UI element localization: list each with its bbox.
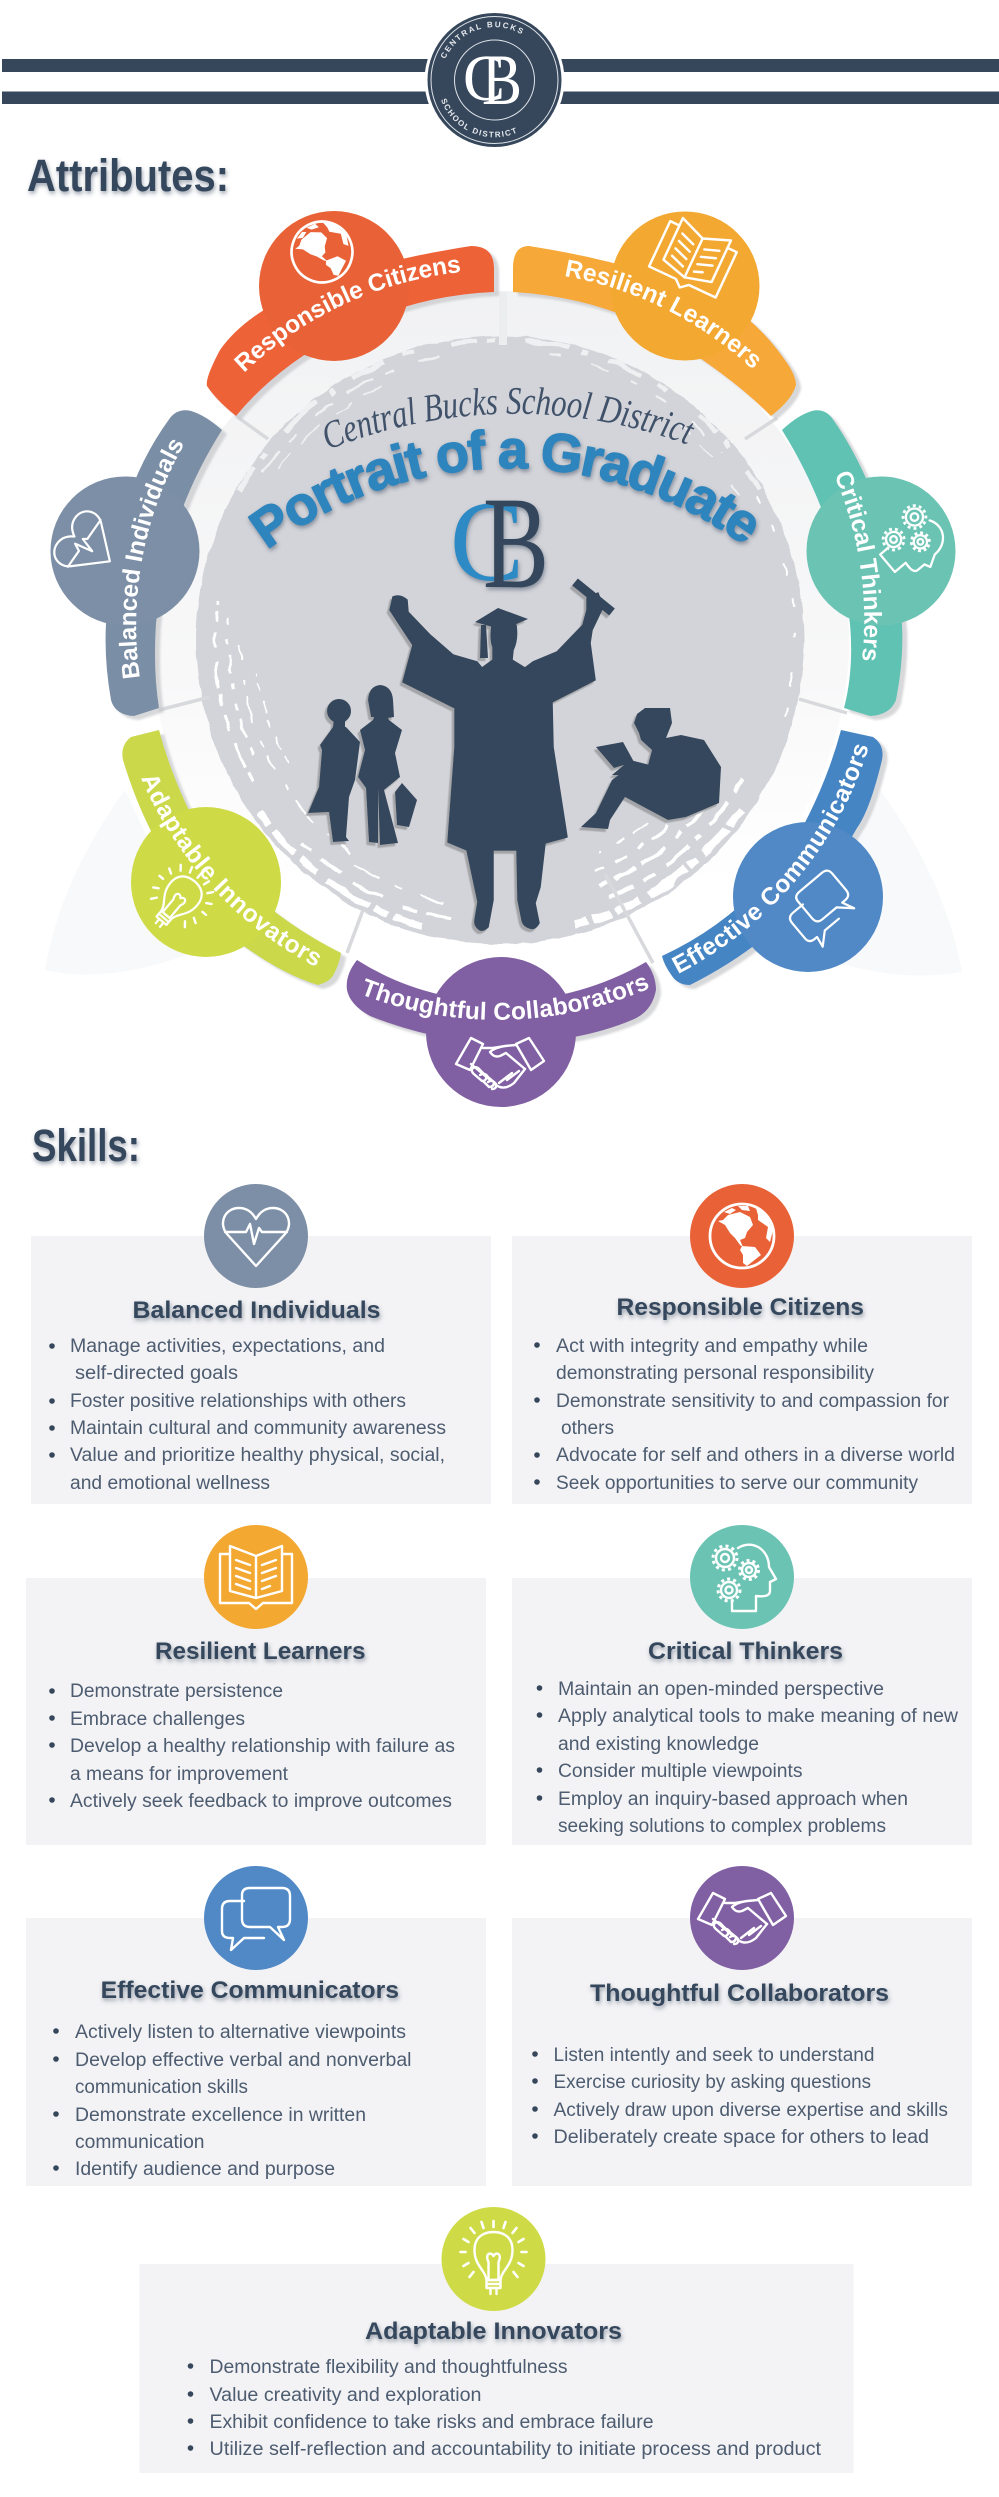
bullet list: Maintain an open-minded perspective bbox=[558, 1679, 884, 1700]
central disc bbox=[151, 291, 849, 989]
bullet list: self-directed goals bbox=[75, 1363, 238, 1384]
icon: light bulb bbox=[135, 854, 224, 944]
bullet list: communication bbox=[75, 2132, 204, 2153]
bullet list bbox=[53, 2022, 412, 2180]
faint background shapes bbox=[45, 790, 962, 976]
bullet list: Consider multiple viewpoints bbox=[558, 1761, 802, 1782]
bullet list: Value creativity and exploration bbox=[210, 2385, 482, 2406]
heading: Thoughtful Collaborators bbox=[590, 1980, 889, 2007]
bullet list: Develop a healthy relationship with failure as bbox=[70, 1736, 455, 1757]
title: Central Bucks School District: Central Bucks School District bbox=[324, 387, 694, 448]
icon: handshake bbox=[698, 1893, 786, 1944]
attribute: Critical Thinkers bbox=[782, 410, 956, 721]
attribute: Responsible Citizens bbox=[206, 211, 500, 418]
heading: Critical Thinkers bbox=[648, 1638, 843, 1665]
district seal: SCHOOL DISTRICT bbox=[442, 98, 516, 138]
bullet list: Develop effective verbal and nonverbal bbox=[75, 2050, 412, 2071]
bullet list: Foster positive relationships with others bbox=[70, 1391, 406, 1412]
header bars bbox=[2, 59, 999, 104]
bullet list bbox=[49, 1336, 446, 1494]
icon: open book bbox=[646, 214, 740, 303]
attribute: Responsible Citizens: Responsible Citizens bbox=[234, 260, 460, 372]
district seal bbox=[425, 13, 564, 147]
attribute: Resilient Learners: Resilient Learners bbox=[566, 260, 760, 368]
district seal: C bbox=[463, 42, 505, 115]
heading: Effective Communicators bbox=[101, 1977, 399, 2004]
panel: Thoughtful Collaborators bbox=[512, 1866, 972, 2186]
silhouette: graduate bbox=[390, 582, 612, 930]
bullet list: communication skills bbox=[75, 2077, 248, 2098]
bullet list: seeking solutions to complex problems bbox=[558, 1816, 886, 1837]
icon: globe bbox=[710, 1204, 774, 1268]
bullet list: and emotional wellness bbox=[70, 1473, 270, 1494]
bullet list: Exercise curiosity by asking questions bbox=[554, 2072, 871, 2093]
icon: head with gears bbox=[869, 500, 955, 587]
panel: Responsible Citizens bbox=[512, 1184, 972, 1504]
icon: heart with pulse bbox=[223, 1208, 289, 1266]
bullet list: Demonstrate excellence in written bbox=[75, 2105, 366, 2126]
bullet list: Demonstrate persistence bbox=[70, 1681, 283, 1702]
bullet list bbox=[537, 1679, 958, 1837]
bullet list: Deliberately create space for others to lead bbox=[554, 2127, 929, 2148]
heading: Responsible Citizens bbox=[616, 1294, 864, 1321]
bullet list: Value and prioritize healthy physical, social, bbox=[70, 1445, 445, 1466]
icon: heart bbox=[49, 506, 127, 586]
bullet list: Maintain cultural and community awareness bbox=[70, 1418, 446, 1439]
icon: open book bbox=[220, 1546, 292, 1609]
icon: light bulb bbox=[460, 2221, 526, 2294]
bullet list bbox=[49, 1681, 455, 1812]
bullet list bbox=[534, 1336, 955, 1494]
icon: speech bubbles bbox=[780, 868, 864, 952]
panel: Resilient Learners bbox=[26, 1525, 486, 1845]
bullet list: Demonstrate flexibility and thoughtfulness bbox=[210, 2357, 568, 2378]
CB logo: B bbox=[483, 469, 549, 616]
bullet list: and existing knowledge bbox=[558, 1734, 759, 1755]
attribute: Balanced Individuals: Balanced Individuals bbox=[118, 440, 183, 678]
bullet list: Actively listen to alternative viewpoints bbox=[75, 2022, 406, 2043]
attribute: Critical Thinkers: Critical Thinkers bbox=[836, 472, 882, 660]
heading: Resilient Learners bbox=[155, 1638, 366, 1665]
icon: globe bbox=[282, 212, 362, 292]
panel: Critical Thinkers bbox=[512, 1525, 972, 1845]
bullet list: Utilize self-reflection and accountability to initiate process and product bbox=[210, 2439, 822, 2460]
title: Portrait of a Graduate: Portrait of a Graduate bbox=[247, 428, 760, 553]
icon: speech bubbles bbox=[222, 1888, 290, 1950]
bullet list: Advocate for self and others in a diverse world bbox=[556, 1445, 955, 1466]
bullet list: Listen intently and seek to understand bbox=[554, 2045, 874, 2066]
icon: head with gears bbox=[713, 1545, 776, 1611]
silhouette: seated student reading bbox=[581, 708, 721, 829]
panel: Balanced Individuals bbox=[31, 1184, 491, 1504]
bullet list: Apply analytical tools to make meaning of new bbox=[558, 1706, 958, 1727]
bullet list: Manage activities, expectations, and bbox=[70, 1336, 385, 1357]
bullet list: demonstrating personal responsibility bbox=[556, 1363, 875, 1384]
bullet list: Actively draw upon diverse expertise and skills bbox=[554, 2100, 948, 2121]
heading: Attributes: Attributes: bbox=[27, 150, 229, 201]
bullet list: Demonstrate sensitivity to and compassion for bbox=[556, 1391, 950, 1412]
attribute: Thoughtful Collaborators: Thoughtful Collaborators bbox=[365, 978, 648, 1020]
attribute: Thoughtful Collaborators bbox=[346, 957, 662, 1107]
icon: handshake bbox=[456, 1038, 544, 1089]
district seal: CENTRAL BUCKS bbox=[441, 22, 524, 58]
bullet list: Identify audience and purpose bbox=[75, 2159, 335, 2180]
heading: Balanced Individuals bbox=[132, 1297, 380, 1324]
panel: Effective Communicators bbox=[26, 1866, 486, 2186]
attribute: Balanced Individuals bbox=[50, 410, 227, 721]
CB logo: C bbox=[450, 478, 524, 606]
bullet list: a means for improvement bbox=[70, 1764, 289, 1785]
bullet list: Exhibit confidence to take risks and embrace failure bbox=[210, 2412, 654, 2433]
bullet list: Seek opportunities to serve our community bbox=[556, 1473, 918, 1494]
bullet list: Actively seek feedback to improve outcomes bbox=[70, 1791, 452, 1812]
attribute: Resilient Learners bbox=[513, 212, 802, 420]
bullet list bbox=[532, 2045, 948, 2148]
district seal: B bbox=[482, 40, 522, 120]
attribute: Adaptable Innovators: Adaptable Innovators bbox=[141, 777, 320, 966]
CB logo bbox=[450, 469, 549, 616]
heading: Skills: Skills: bbox=[32, 1120, 140, 1171]
bullet list: Embrace challenges bbox=[70, 1709, 245, 1730]
bullet list: Employ an inquiry-based approach when bbox=[558, 1789, 908, 1810]
silhouette: two children bbox=[308, 685, 417, 845]
bullet list: Act with integrity and empathy while bbox=[556, 1336, 868, 1357]
panel: Adaptable Innovators bbox=[140, 2207, 854, 2473]
heading: Adaptable Innovators bbox=[365, 2318, 622, 2345]
attribute: Effective Communicators: Effective Communicators bbox=[672, 744, 868, 974]
bullet list: others bbox=[561, 1418, 614, 1439]
bullet list bbox=[188, 2357, 822, 2460]
attribute: Adaptable Innovators bbox=[122, 730, 346, 990]
